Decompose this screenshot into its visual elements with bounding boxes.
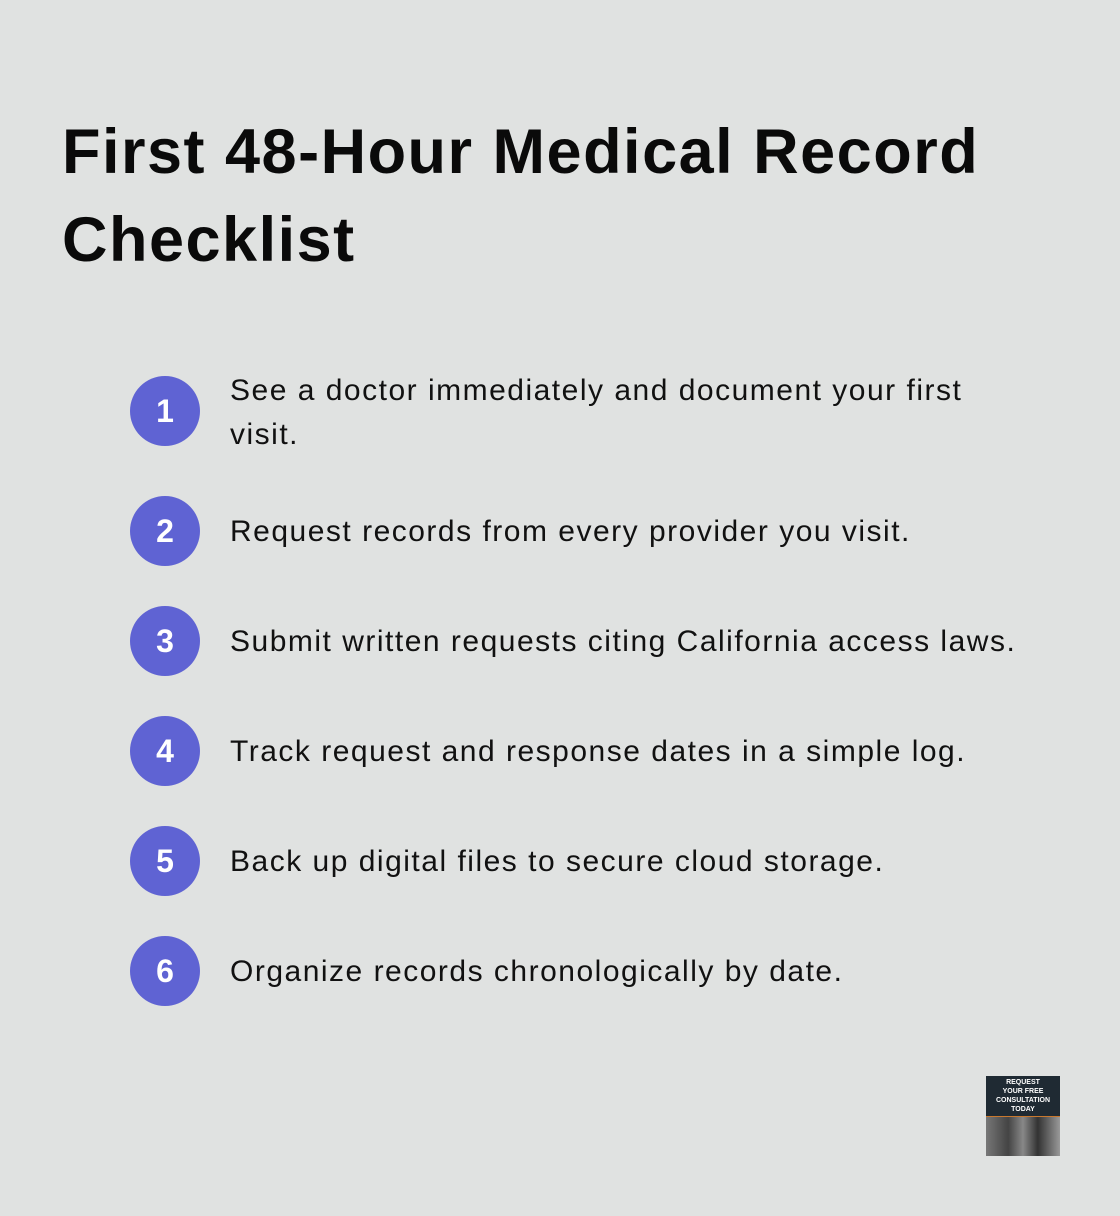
item 6: 6 — [156, 953, 174, 989]
item 5: 5 — [156, 843, 174, 879]
item 1: See a doctor immediately and document your first visit. — [230, 374, 962, 451]
logo: consultation badge: CONSULTATION — [996, 1097, 1050, 1104]
item 6 — [130, 936, 843, 1006]
item 3 — [130, 606, 1016, 676]
logo: consultation badge: REQUEST — [1006, 1079, 1040, 1086]
item 4: 4 — [156, 733, 174, 769]
logo: consultation badge: TODAY — [1011, 1106, 1035, 1113]
item 2 — [130, 496, 911, 566]
item 2: Request records from every provider you visit. — [230, 515, 911, 548]
title: Checklist — [62, 205, 356, 275]
item 3: 3 — [156, 623, 174, 659]
title — [62, 117, 979, 275]
item 4 — [130, 716, 966, 786]
item 5 — [130, 826, 884, 896]
logo: consultation badge: YOUR FREE — [1003, 1088, 1043, 1095]
item 1: 1 — [156, 393, 174, 429]
item 3: Submit written requests citing California access laws. — [230, 625, 1016, 658]
title: First 48-Hour Medical Record — [62, 117, 979, 187]
item 6: Organize records chronologically by date. — [230, 955, 843, 988]
item 4: Track request and response dates in a simple log. — [230, 735, 966, 768]
logo: consultation badge — [986, 1076, 1060, 1156]
item 2: 2 — [156, 513, 174, 549]
item 5: Back up digital files to secure cloud storage. — [230, 845, 884, 878]
